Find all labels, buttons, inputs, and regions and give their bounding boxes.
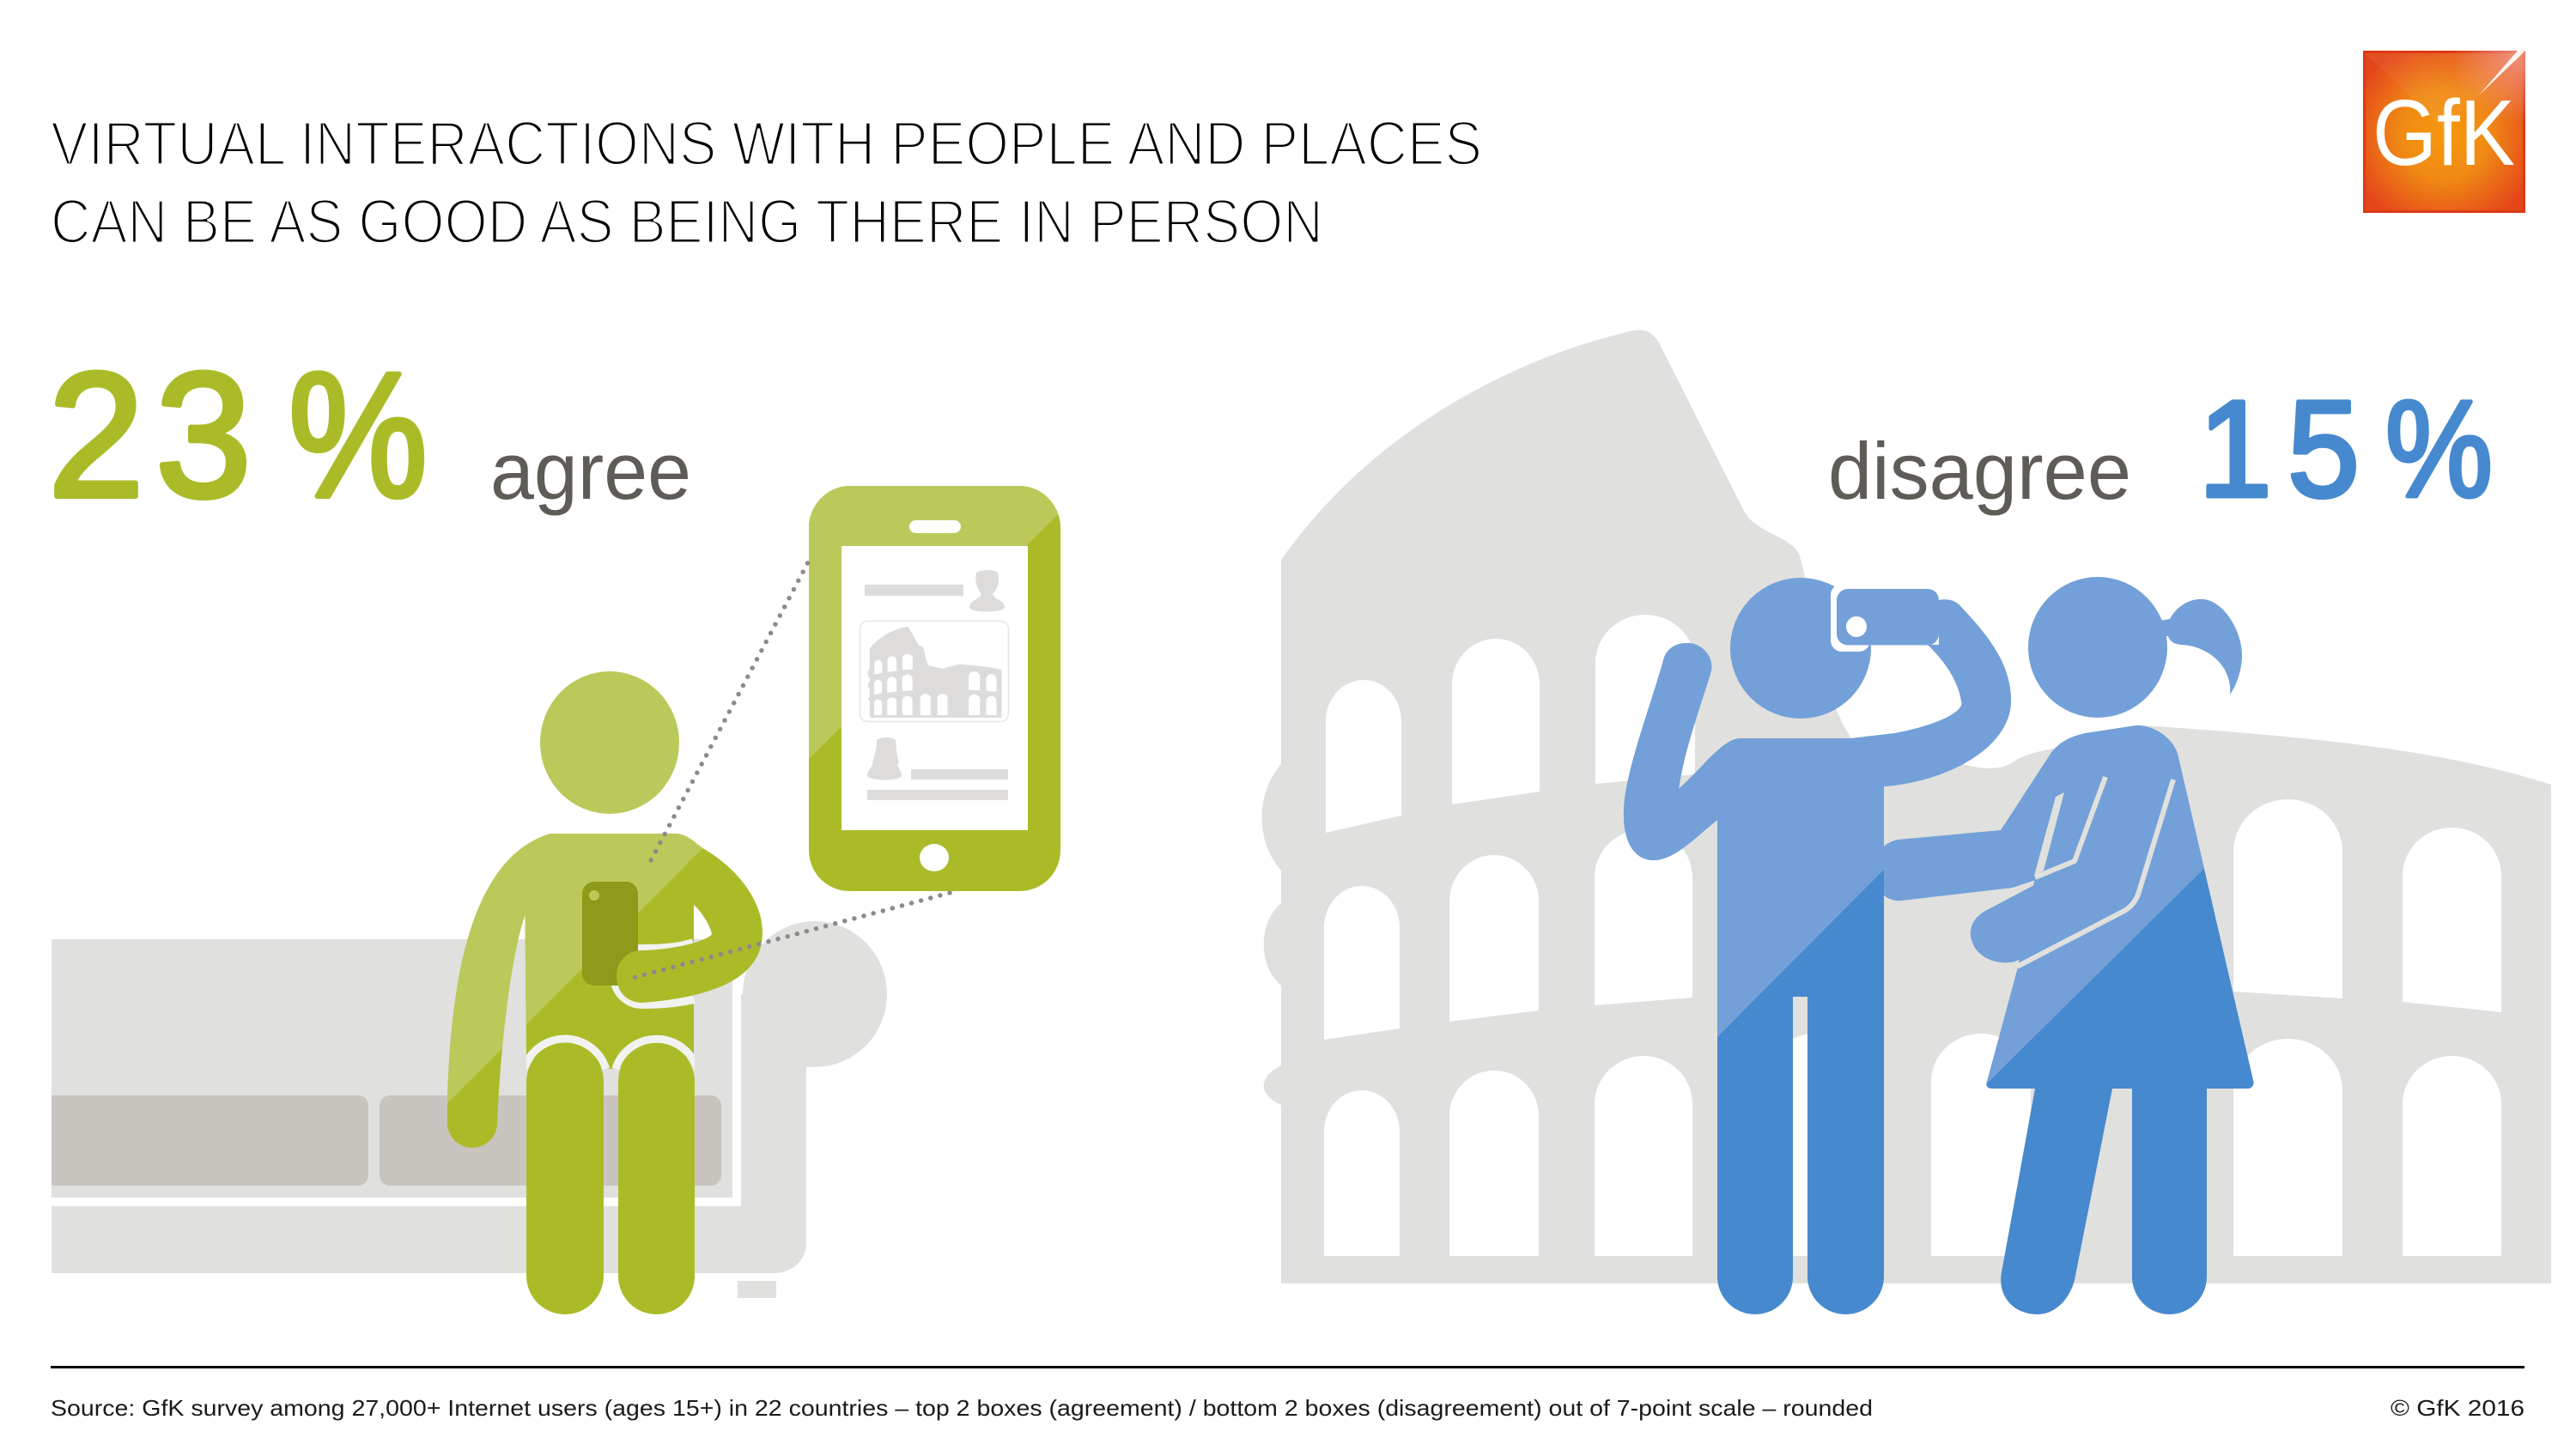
screen text bar xyxy=(865,585,963,596)
arm outlines xyxy=(2017,777,2173,967)
reaching arm xyxy=(1884,754,2078,901)
dotted connector: phone to tablet top xyxy=(648,563,807,865)
number 15 % xyxy=(2198,372,2493,525)
icon: female avatar xyxy=(867,737,902,780)
number 15 %: 5 xyxy=(2287,372,2360,525)
tablet body xyxy=(809,486,1060,891)
number 15 %: % xyxy=(2385,372,2493,525)
tablet speaker xyxy=(909,520,961,533)
screen text bar xyxy=(911,769,1008,780)
man body xyxy=(1624,599,2011,1314)
green person on sofa xyxy=(447,671,762,1314)
stat: 23 % agree xyxy=(48,336,691,534)
title: CAN BE AS GOOD AS BEING THERE IN PERSON xyxy=(51,188,1323,257)
label: disagree: disagree xyxy=(1828,426,2131,516)
number 15 %: 1 xyxy=(2198,372,2272,525)
sofa xyxy=(52,921,887,1298)
number 23 % xyxy=(48,336,428,534)
screen text bar xyxy=(867,790,1008,800)
woman with ponytail xyxy=(1884,577,2254,1314)
tablet home button xyxy=(920,844,949,871)
leg halos xyxy=(524,1039,697,1069)
logo: GfK: GfK xyxy=(2372,81,2515,185)
source note: Source: GfK survey among 27,000+ Internet users (ages 15+) in 22 countries – top 2 boxes (agreement) / bottom 2 boxes (disagreement) out of 7-point scale – rounded xyxy=(51,1395,1873,1421)
dotted connector: phone to tablet bottom xyxy=(630,893,950,979)
logo: GfK xyxy=(2363,51,2525,213)
camera xyxy=(1837,589,1939,646)
phone in hand xyxy=(582,882,638,986)
footer rule xyxy=(51,1366,2524,1368)
man taking a photo xyxy=(1624,578,2011,1314)
number 23 %: 2 xyxy=(48,336,144,534)
left leg xyxy=(526,1043,604,1314)
torso and arm: green person xyxy=(447,834,702,1148)
copyright: © GfK 2016 xyxy=(2391,1395,2524,1421)
crossed arm xyxy=(1971,777,2172,962)
head: woman xyxy=(2028,577,2167,718)
post card with colosseum xyxy=(860,622,1008,721)
title xyxy=(51,110,1482,257)
tablet screen xyxy=(841,546,1028,830)
arm halo xyxy=(617,944,694,1003)
head: man xyxy=(1730,578,1871,719)
icon: male avatar xyxy=(969,570,1005,611)
title: VIRTUAL INTERACTIONS WITH PEOPLE AND PLACES xyxy=(51,110,1482,179)
forearm xyxy=(617,848,762,1003)
stat: disagree 15 % xyxy=(1828,372,2493,525)
ponytail xyxy=(2160,599,2242,695)
number 23 %: 3 xyxy=(155,336,252,534)
label: agree: agree xyxy=(490,426,691,516)
number 23 %: % xyxy=(289,336,428,534)
tablet xyxy=(809,486,1060,891)
head: green person xyxy=(540,671,679,814)
right leg xyxy=(618,1043,695,1314)
colosseum xyxy=(1262,330,2551,1283)
camera halo xyxy=(1831,584,1870,652)
gap between arms xyxy=(2034,792,2064,876)
woman body xyxy=(1986,725,2254,1314)
